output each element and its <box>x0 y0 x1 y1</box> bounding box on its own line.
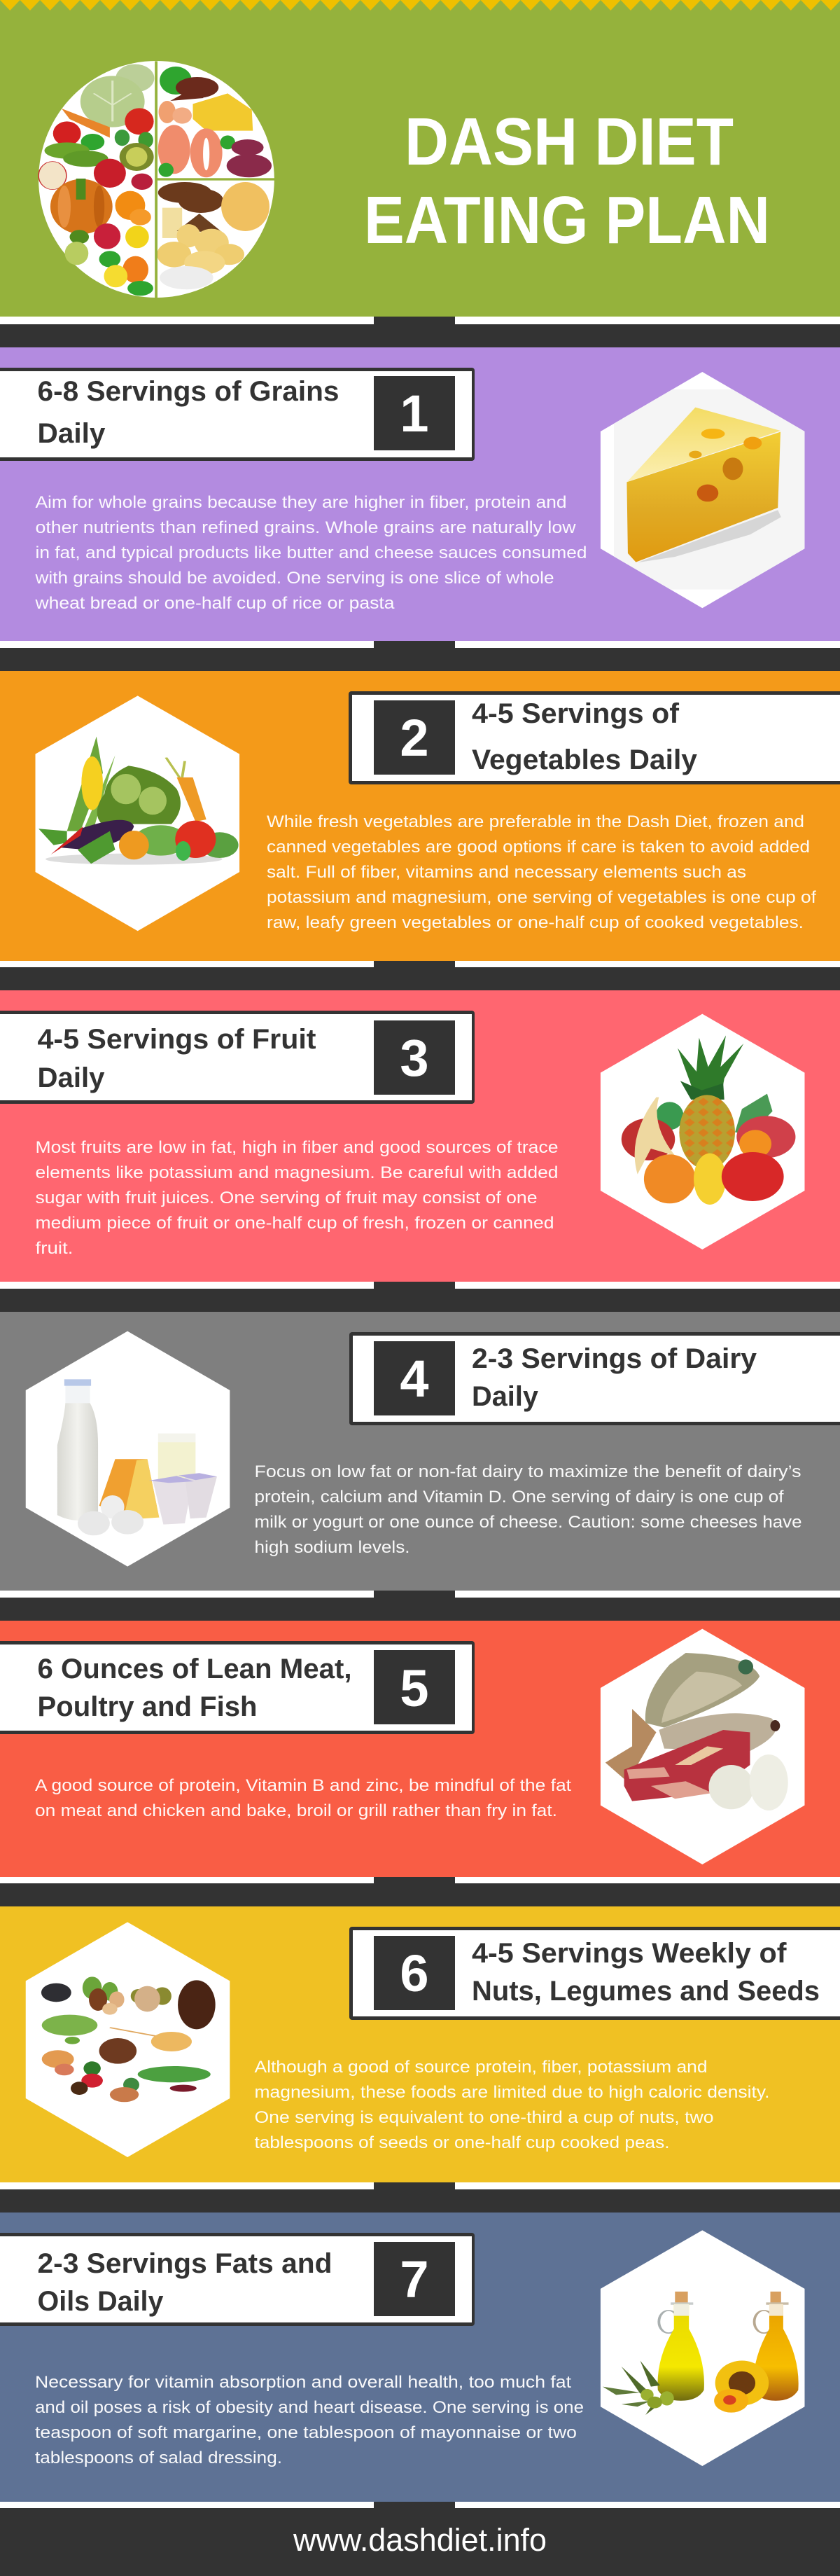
body text: and oil poses a risk of obesity and heart disease. One serving is one <box>35 2398 584 2417</box>
heading banner 7: 7 <box>400 2250 429 2308</box>
body text: fruit. <box>35 1239 73 1258</box>
heading banner 4: 4 <box>400 1350 429 1408</box>
heading banner 1: 1 <box>400 385 429 443</box>
heading banner 5 <box>0 1641 475 1734</box>
panel background <box>0 2213 840 2502</box>
heading banner 1: Daily <box>38 418 106 449</box>
panel: fats and oils <box>0 2213 840 2502</box>
heading banner 4: 2-3 Servings of Dairy <box>472 1343 757 1374</box>
title: DASH DIET <box>405 104 734 179</box>
heading banner 3 <box>0 1011 475 1104</box>
body text <box>255 2058 770 2152</box>
footer background <box>0 2508 840 2576</box>
body text <box>34 493 587 613</box>
body text: other nutrients than refined grains. Whole grains are naturally low <box>35 518 576 537</box>
heading banner 6 <box>349 1927 840 2020</box>
title: EATING PLAN <box>364 183 770 258</box>
body text: high sodium levels. <box>255 1538 410 1557</box>
heading banner 1: 6-8 Servings of Grains <box>38 376 339 407</box>
body text <box>255 1462 802 1557</box>
website url: www.dashdiet.info <box>293 2522 547 2558</box>
body text: tablespoons of seeds or one-half cup cooked peas. <box>255 2133 669 2152</box>
heading banner 7: 2-3 Servings Fats and <box>38 2248 332 2279</box>
body text <box>35 1776 571 1820</box>
heading banner 6: 6 <box>400 1944 429 2002</box>
panel: grains <box>0 347 840 641</box>
body text: milk or yogurt or one ounce of cheese. Caution: some cheeses have <box>255 1513 802 1532</box>
body text: in fat, and typical products like butter and cheese sauces consumed <box>35 543 587 562</box>
panel background <box>0 671 840 961</box>
heading banner 1 <box>0 368 475 461</box>
body text: protein, calcium and Vitamin D. One serving of dairy is one cup of <box>255 1488 784 1507</box>
body text: with grains should be avoided. One serving is one slice of whole <box>34 569 554 588</box>
icon: dairy in hexagon <box>26 1331 230 1567</box>
heading banner 2: Vegetables Daily <box>472 745 698 775</box>
header panel <box>0 0 840 317</box>
zigzag top border <box>0 0 840 11</box>
heading banner 7 <box>0 2233 475 2326</box>
heading banner 5: Poultry and Fish <box>38 1691 257 1722</box>
body text <box>35 2373 584 2467</box>
heading banner 2 <box>349 691 840 784</box>
heading banner 5: 5 <box>400 1659 429 1717</box>
panel background <box>0 1312 840 1591</box>
body text: teaspoon of soft margarine, one tablespoon of mayonnaise or two <box>35 2423 577 2442</box>
panel: fruit <box>0 990 840 1282</box>
body text: While fresh vegetables are preferable in the Dash Diet, frozen and <box>267 812 804 831</box>
body text: One serving is equivalent to one-third a cup of nuts, two <box>255 2108 714 2127</box>
body text: salt. Full of fiber, vitamins and necessary elements such as <box>267 863 746 882</box>
icon: nuts and seeds in hexagon <box>26 1922 230 2157</box>
heading banner 5: 6 Ounces of Lean Meat, <box>38 1654 351 1684</box>
body text: Although a good of source protein, fiber, potassium and <box>255 2058 707 2077</box>
body text: magnesium, these foods are limited due to high caloric density. <box>255 2083 770 2102</box>
heading banner 2: 2 <box>400 709 429 767</box>
icon: food plate <box>38 61 275 298</box>
heading banner 7: Oils Daily <box>38 2286 164 2317</box>
heading banner 6: 4-5 Servings Weekly of <box>472 1938 787 1969</box>
body text <box>35 1138 559 1258</box>
body text: elements like potassium and magnesium. Be careful with added <box>35 1163 559 1182</box>
heading banner 6: Nuts, Legumes and Seeds <box>472 1976 820 2007</box>
panel background <box>0 990 840 1282</box>
body text: wheat bread or one-half cup of rice or pasta <box>34 594 395 613</box>
body text: Necessary for vitamin absorption and overall health, too much fat <box>35 2373 571 2392</box>
icon: cheese in hexagon <box>601 372 804 608</box>
body text: raw, leafy green vegetables or one-half cup of cooked vegetables. <box>267 913 804 932</box>
body text: canned vegetables are good options if care is taken to avoid added <box>267 838 810 857</box>
panel: nuts, legumes and seeds <box>0 1906 840 2182</box>
header background <box>0 0 840 317</box>
body text: Aim for whole grains because they are higher in fiber, protein and <box>35 493 567 512</box>
panel background <box>0 1906 840 2182</box>
body text: Most fruits are low in fat, high in fiber and good sources of trace <box>35 1138 559 1157</box>
body text: medium piece of fruit or one-half cup of fresh, frozen or canned <box>35 1214 554 1233</box>
icon: fruit in hexagon <box>601 1014 804 1249</box>
body text <box>267 812 816 932</box>
icon: vegetables in hexagon <box>36 695 239 931</box>
body text: Focus on low fat or non-fat dairy to maximize the benefit of dairy’s <box>255 1462 801 1481</box>
body text: potassium and magnesium, one serving of vegetables is one cup of <box>267 888 816 907</box>
icon: meat, fish and eggs in hexagon <box>601 1629 804 1864</box>
heading banner 3: Daily <box>38 1062 105 1093</box>
body text: sugar with fruit juices. One serving of fruit may consist of one <box>35 1189 538 1207</box>
body text: on meat and chicken and bake, broil or grill rather than fry in fat. <box>35 1801 557 1820</box>
heading banner 4 <box>349 1332 840 1425</box>
heading banner 4: Daily <box>472 1381 539 1412</box>
body text: tablespoons of salad dressing. <box>35 2449 282 2467</box>
footer <box>0 2508 840 2576</box>
icon: oil bottles in hexagon <box>601 2230 804 2466</box>
panel: dairy <box>0 1312 840 1591</box>
title <box>364 104 770 258</box>
heading banner 3: 3 <box>400 1029 429 1087</box>
panel background <box>0 347 840 641</box>
heading banner 2: 4-5 Servings of <box>472 698 680 729</box>
panel background <box>0 1621 840 1877</box>
body text: A good source of protein, Vitamin B and zinc, be mindful of the fat <box>35 1776 571 1795</box>
panel: vegetables <box>0 671 840 961</box>
panel: lean meat <box>0 1621 840 1877</box>
heading banner 3: 4-5 Servings of Fruit <box>38 1024 316 1055</box>
